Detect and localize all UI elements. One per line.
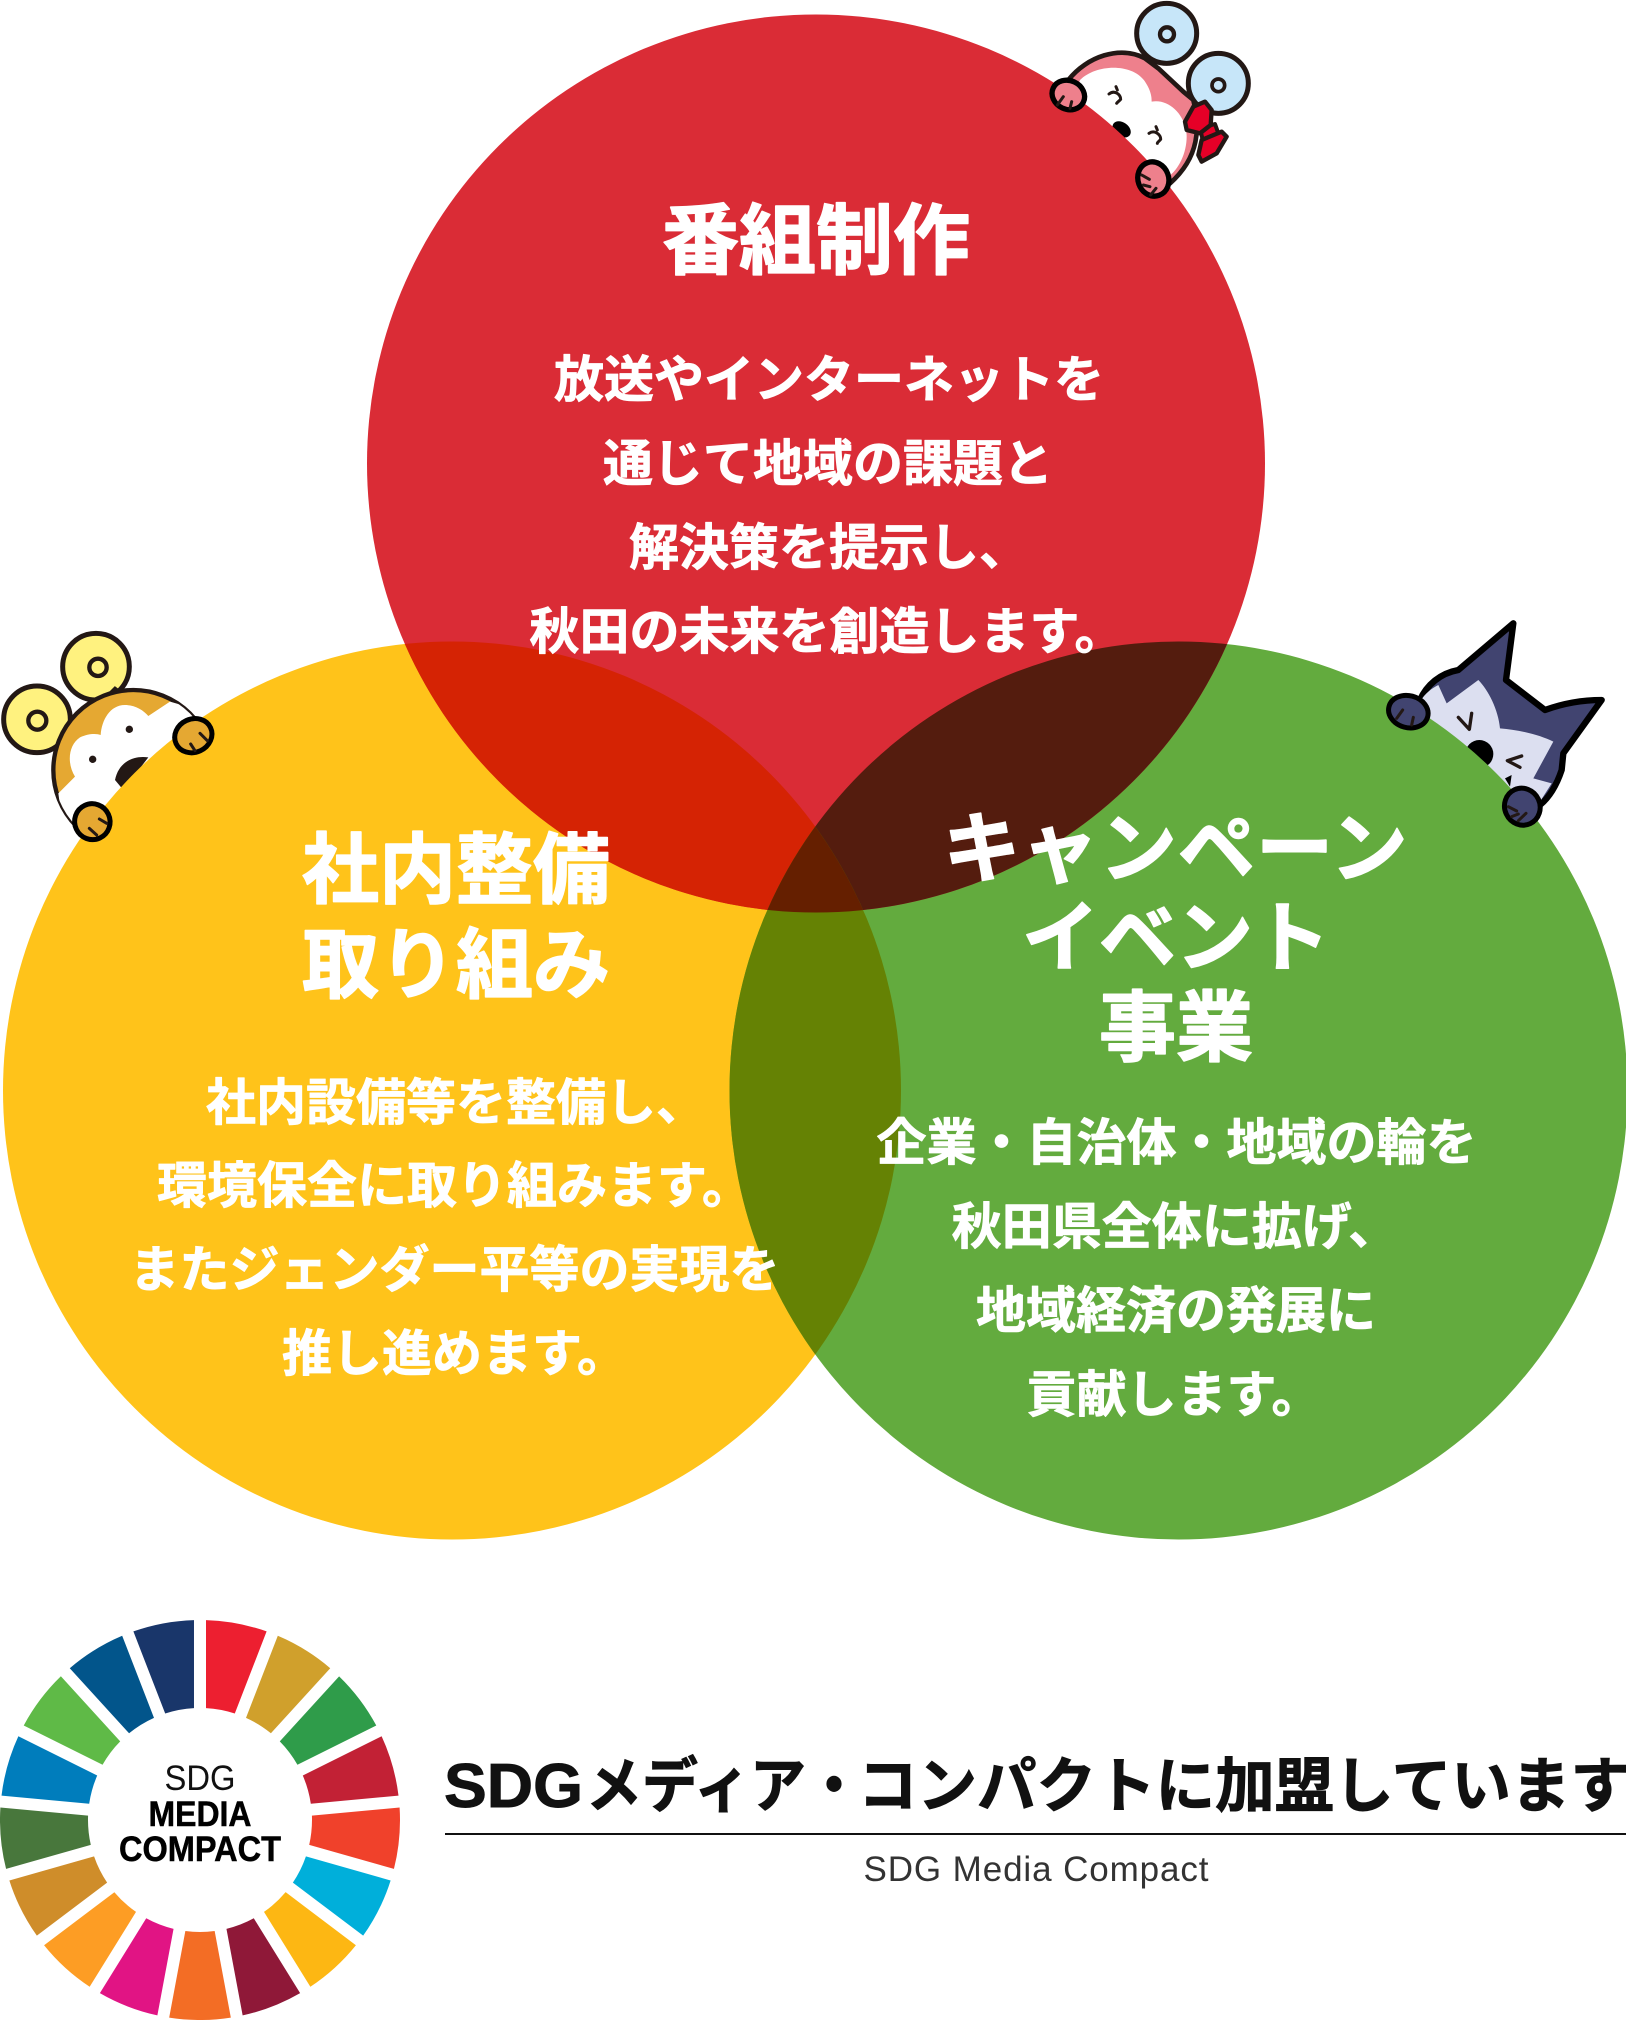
logo: SDG Media Compact wheel: MEDIA <box>148 1795 252 1834</box>
mascot: navy cat paws <box>1385 691 1546 831</box>
heading: campaign events: イベント <box>1022 896 1330 982</box>
heading: internal initiatives: 社内整備 <box>302 828 610 914</box>
mascot: pink character paws <box>1047 75 1174 201</box>
mascot: pink character head <box>1063 3 1248 200</box>
logo: SDG Media Compact wheel: SDG <box>164 1759 236 1798</box>
heading: SDG Media Compact membership: コンパクトに加盟しています <box>858 1753 1626 1820</box>
heading: campaign events <box>943 807 1409 1072</box>
text block: campaign events: 企業・自治体・地域の輪を <box>876 1115 1476 1171</box>
overlap: red and yellow <box>404 642 815 910</box>
overlap: red and green <box>768 642 1227 910</box>
logo: SDG Media Compact wheel: COMPACT <box>119 1830 281 1869</box>
text block: program production: 放送やインターネットを <box>554 352 1104 408</box>
mascot: yellow character paws <box>69 713 218 845</box>
text block: program production: 秋田の未来を創造します。 <box>530 604 1124 660</box>
logo: SDG Media Compact wheel <box>0 1610 409 2020</box>
text block: campaign events: 地域経済の発展に <box>976 1283 1376 1339</box>
heading: internal initiatives: 取り組み <box>302 923 610 1009</box>
text block: internal initiatives: 社内設備等を整備し、 <box>206 1075 706 1131</box>
divider line <box>445 1833 1626 1835</box>
heading: program production: 番組制作 <box>662 199 970 285</box>
text block: internal initiatives <box>130 1075 780 1382</box>
heading: SDG Media Compact membership: SDG <box>444 1752 583 1821</box>
subtitle: SDG Media Compact <box>864 1850 1209 1889</box>
circle: yellow <box>3 642 901 1540</box>
circle: green <box>730 642 1626 1540</box>
text block: campaign events: 秋田県全体に拡げ、 <box>952 1199 1398 1255</box>
text block: campaign events: 貢献します。 <box>1026 1367 1322 1423</box>
overlap: yellow and green <box>730 826 901 1354</box>
heading: SDG Media Compact membership: メディア・ <box>586 1753 862 1820</box>
text block: internal initiatives: またジェンダー平等の実現を <box>130 1242 780 1298</box>
circle: red <box>367 14 1265 912</box>
mascot: yellow character head <box>1 630 196 825</box>
text block: program production <box>530 352 1124 660</box>
text block: program production: 解決策を提示し、 <box>629 520 1029 576</box>
overlap: all three <box>768 826 863 912</box>
heading: SDG Media Compact membership <box>444 1752 1626 1821</box>
mascot: navy cat head <box>1390 623 1602 817</box>
text block: campaign events <box>876 1115 1476 1423</box>
text block: program production: 通じて地域の課題と <box>603 436 1053 492</box>
text block: internal initiatives: 環境保全に取り組みます。 <box>157 1158 752 1214</box>
heading: campaign events: 事業 <box>1099 986 1253 1072</box>
text block: internal initiatives: 推し進めます。 <box>282 1326 627 1382</box>
heading: internal initiatives <box>302 828 610 1009</box>
heading: campaign events: キャンペーン <box>943 807 1409 893</box>
